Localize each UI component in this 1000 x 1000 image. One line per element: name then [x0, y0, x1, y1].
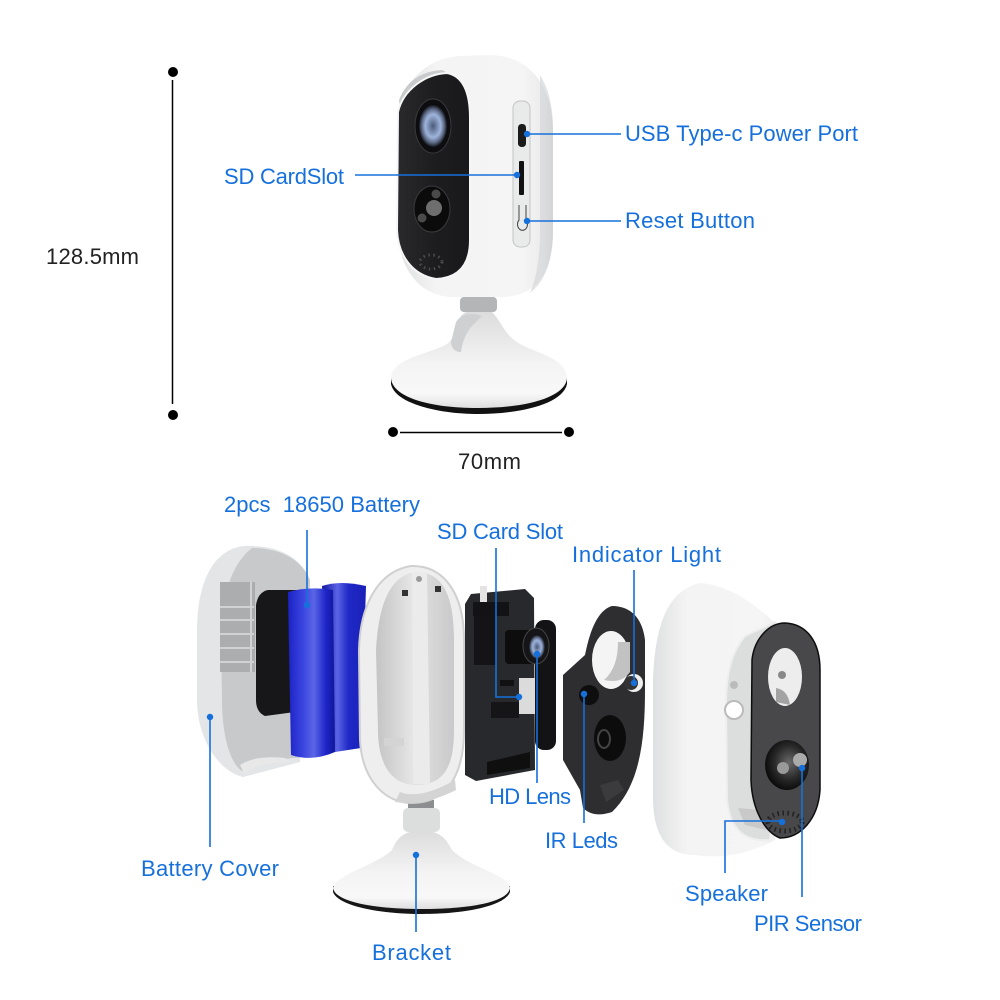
callout: HD lens	[489, 651, 571, 809]
stand base	[391, 297, 567, 414]
side port strip	[513, 101, 530, 247]
IR LED plate	[563, 606, 645, 814]
callout: SD card slot top	[224, 164, 520, 189]
body right edge shade	[530, 75, 553, 293]
speaker holes	[420, 255, 442, 269]
right camera shell	[653, 583, 790, 856]
dimension: width: 70mm	[458, 449, 521, 474]
callout: PIR sensor: PIR Sensor	[754, 911, 862, 936]
callout: USB port: USB Type-c Power Port	[625, 121, 858, 146]
exploded view	[197, 546, 820, 914]
battery cover	[197, 546, 310, 777]
callout: SD card slot	[437, 519, 563, 700]
camera lens	[415, 99, 451, 153]
callout: indicator light	[572, 542, 721, 686]
right face plate	[751, 623, 820, 838]
batteries	[288, 583, 366, 758]
callout: IR leds	[545, 691, 618, 853]
callout: battery cover	[141, 714, 279, 881]
dark lens panel	[397, 73, 470, 279]
callout: indicator light: Indicator Light	[572, 542, 721, 567]
callout: bracket: Bracket	[372, 940, 451, 965]
dimension: height	[46, 67, 178, 420]
callout: SD card slot top: SD CardSlot	[224, 164, 344, 189]
PIR sensor	[414, 186, 450, 232]
callout: PIR sensor	[754, 765, 862, 936]
camera front view	[391, 55, 567, 414]
callout: battery cover: Battery Cover	[141, 856, 279, 881]
callout: IR leds: IR Leds	[545, 828, 618, 853]
dimension: width	[388, 427, 574, 474]
callout: USB port	[524, 121, 858, 146]
callout: battery	[224, 492, 420, 608]
callout: speaker: Speaker	[685, 881, 768, 906]
callout: reset button	[524, 208, 755, 233]
neck ring	[460, 297, 497, 312]
callout: reset button: Reset Button	[625, 208, 755, 233]
rear housing	[359, 566, 464, 803]
dimension: height: 128.5mm	[46, 244, 139, 269]
HD lens module	[505, 620, 556, 750]
callout: speaker	[685, 819, 785, 906]
callout: HD lens: HD Lens	[489, 784, 571, 809]
callout: battery: 2pcs 18650 Battery	[224, 492, 420, 517]
camera body	[397, 55, 553, 297]
circuit board	[465, 586, 540, 781]
callout: bracket	[372, 852, 451, 965]
bracket stand	[333, 800, 510, 914]
callout: SD card slot: SD Card Slot	[437, 519, 563, 544]
